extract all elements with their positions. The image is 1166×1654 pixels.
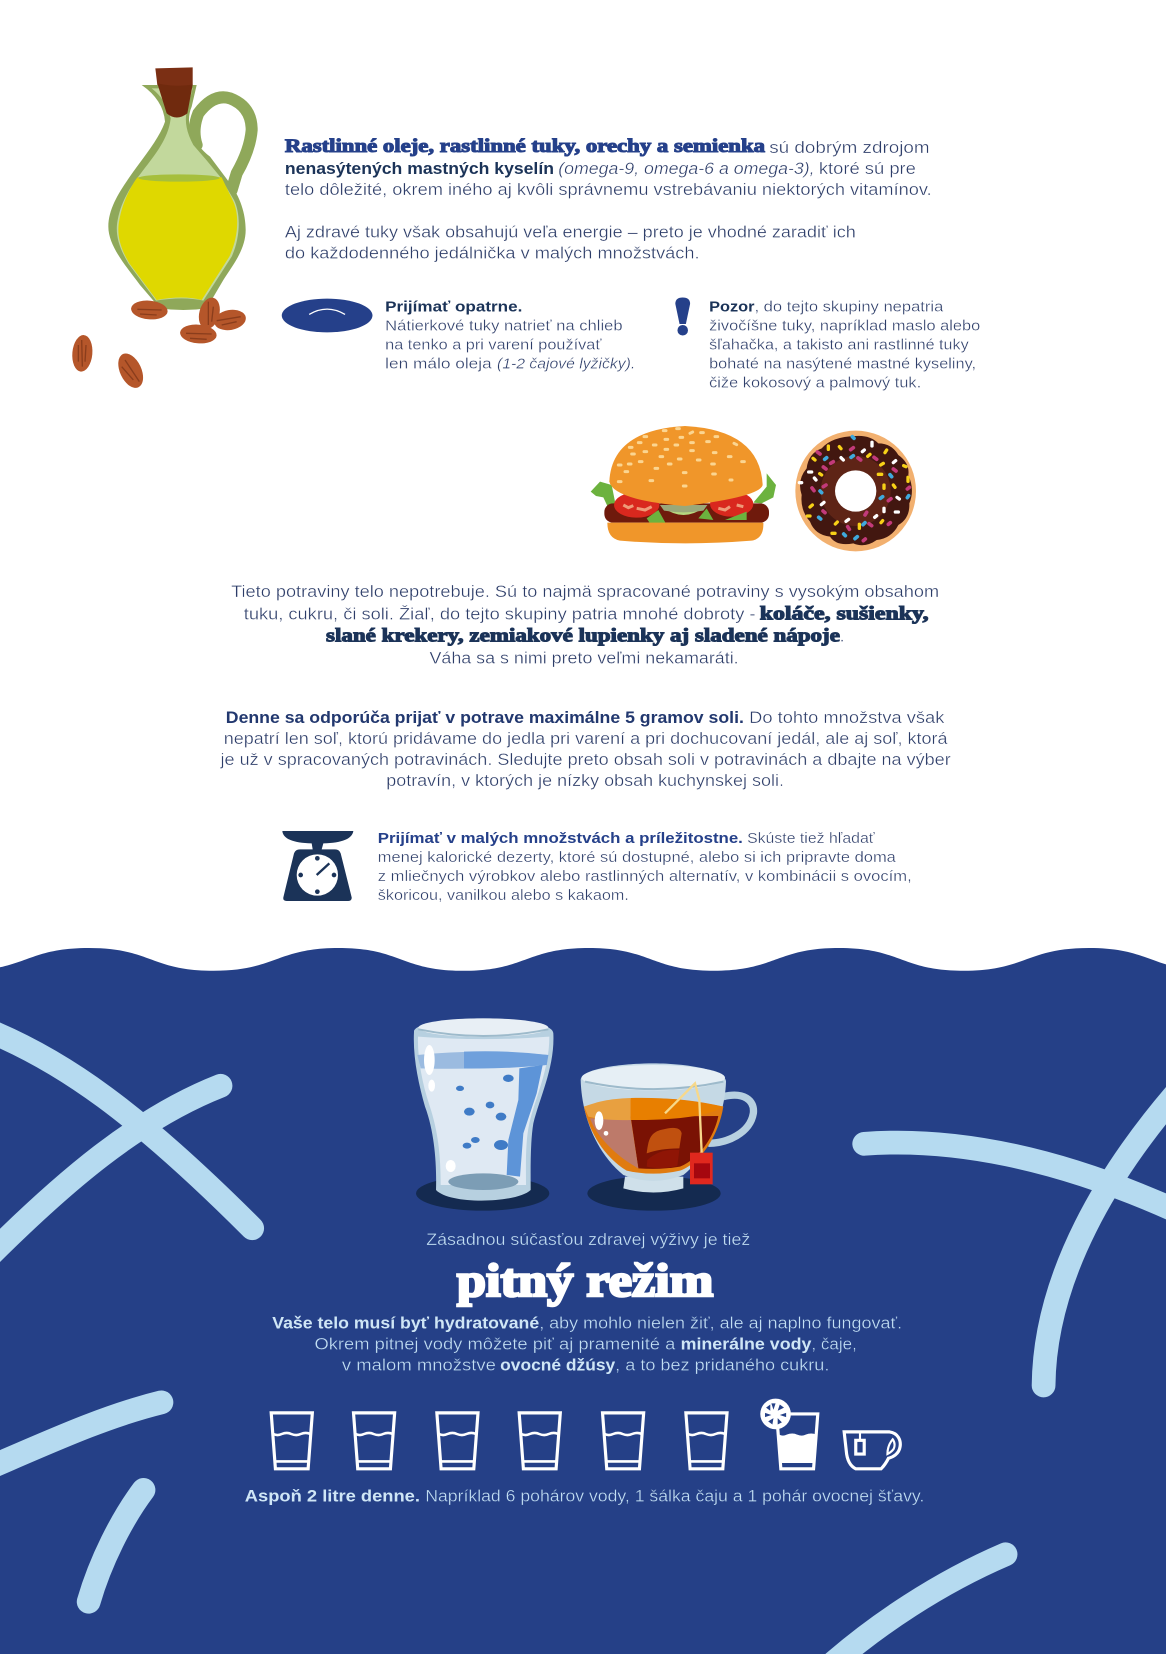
text block: healthy fats intro (285, 136, 932, 263)
text block: unnecessary foods: slané krekery, zemiakové lupienky aj sladené nápoje (326, 626, 840, 646)
panel: blue hydration section (0, 948, 1166, 1654)
text block: unnecessary foods: tuku, cukru, či soli. Žiaľ, do tejto skupiny patria mnohé dobroty - (244, 604, 756, 623)
text block: hydration advice (272, 1314, 902, 1375)
text block: small amounts: menej kalorické dezerty, ktoré sú dostupné, alebo si ich pripravte doma (378, 850, 897, 866)
text block: healthy fats intro: Aj zdravé tuky však obsahujú veľa energie – preto je vhodné zaradiť ich (285, 223, 856, 241)
text block: warning (709, 299, 980, 391)
text block: hydration advice: v malom množstve (342, 1357, 496, 1375)
text block: healthy fats intro: ktoré sú pre (819, 160, 916, 178)
text block: healthy fats intro: telo dôležité, okrem iného aj kvôli správnemu vstrebávaniu niektorých vitamínov. (285, 181, 932, 199)
text: daily amount (245, 1488, 924, 1506)
text block: healthy fats intro: (omega-9, omega-6 a omega-3), (558, 160, 815, 178)
text block: hydration advice: , čaje, (811, 1336, 857, 1354)
icon: tea cup (844, 1432, 900, 1469)
text block: small amounts: škoricou, vanilkou alebo s kakaom. (378, 888, 629, 904)
icon: water glass 3 (437, 1413, 478, 1469)
text block: warning: čiže kokosový a palmový tuk. (709, 375, 921, 391)
text block: warning: , do tejto skupiny nepatria (754, 299, 944, 315)
text block: hydration advice: , aby mohlo nielen žiť, ale aj naplno fungovať. (539, 1314, 902, 1332)
text block: consume carefully: Nátierkové tuky natrieť na chlieb (385, 318, 623, 334)
text block: hydration advice: ovocné džúsy (500, 1357, 615, 1375)
text block: hydration advice: minerálne vody (681, 1336, 811, 1354)
icon: kitchen scale (282, 831, 353, 901)
text block: salt recommendation: Do tohto množstva však (749, 709, 945, 727)
text block: salt recommendation: potravín, v ktorých je nízky obsah kuchynskej soli. (386, 772, 784, 790)
heading: pitný režim: pitný režim (457, 1256, 713, 1307)
text block: small amounts: z mliečnych výrobkov alebo rastlinných alternatív, v kombinácii s ovocím, (378, 869, 912, 885)
icon: plate (282, 299, 372, 332)
text block: small amounts: Prijímať v malých množstvách a príležitostne. (378, 831, 743, 847)
text: daily amount: Aspoň 2 litre denne. (245, 1488, 420, 1506)
text block: small amounts: Skúste tiež hľadať (747, 831, 875, 847)
text: hydration lead-in: Zásadnou súčasťou zdravej výživy je tiež (426, 1231, 750, 1249)
text block: unnecessary foods (231, 583, 939, 668)
text block: salt recommendation (219, 709, 951, 790)
text block: warning: Pozor (709, 299, 755, 315)
text block: consume carefully (385, 299, 635, 372)
text block: consume carefully: Prijímať opatrne. (385, 299, 522, 315)
icon: water glass 5 (603, 1413, 644, 1469)
text block: unnecessary foods: koláče, sušienky, (760, 603, 929, 623)
text block: healthy fats intro: sú dobrým zdrojom (769, 139, 930, 157)
icon: juice glass with citrus slice (760, 1399, 818, 1469)
background brush curves (0, 1029, 1166, 1654)
text block: unnecessary foods: . (840, 628, 844, 646)
text block: warning: šľahačka, a takisto ani rastlinné tuky (709, 337, 969, 353)
text block: hydration advice: , a to bez pridaného cukru. (615, 1357, 829, 1375)
icon: water glass 2 (353, 1413, 395, 1469)
text block: healthy fats intro: Rastlinné oleje, rastlinné tuky, orechy a semienka (285, 136, 765, 156)
text block: warning: bohaté na nasýtené mastné kyseliny, (709, 356, 976, 372)
text block: healthy fats intro: do každodenného jedálnička v malých množstvách. (285, 245, 700, 263)
icon: water glass 4 (519, 1413, 560, 1469)
text block: hydration advice: Vaše telo musí byť hydratované (272, 1314, 539, 1332)
illustration: glass of water (414, 1018, 553, 1211)
text block: consume carefully: na tenko a pri varení používať (385, 337, 602, 353)
icon: water glass 6 (686, 1413, 727, 1469)
text block: salt recommendation: Denne sa odporúča prijať v potrave maximálne 5 gramov soli. (226, 709, 744, 727)
text: daily amount: Napríklad 6 pohárov vody, 1 šálka čaju a 1 pohár ovocnej šťavy. (425, 1488, 924, 1506)
text block: consume carefully: (1-2 čajové lyžičky). (497, 356, 635, 372)
icon: exclamation mark (675, 298, 690, 336)
text block: unnecessary foods: Tieto potraviny telo nepotrebuje. Sú to najmä spracované potraviny s vysokým obsahom (231, 583, 939, 601)
icon row: daily drinks (271, 1399, 900, 1469)
text block: warning: živočíšne tuky, napríklad maslo alebo (709, 318, 980, 334)
text block: hydration advice: Okrem pitnej vody môžete piť aj pramenité a (314, 1336, 676, 1354)
text block: unnecessary foods: Váha sa s nimi preto veľmi nekamaráti. (429, 650, 739, 668)
illustration: burger (591, 426, 776, 543)
illustration: oil jug with almonds (71, 67, 252, 392)
text block: consume carefully: len málo oleja (385, 356, 493, 372)
text block: healthy fats intro: nenasýtených mastných kyselín (285, 160, 554, 178)
text block: salt recommendation: nepatrí len soľ, ktorú pridávame do jedla pri varení a pri dochucovaní jedál, ale aj soľ, ktorá (224, 730, 949, 748)
icon: water glass 1 (271, 1413, 312, 1469)
illustration: cup of tea (581, 1063, 753, 1211)
text block: salt recommendation: je už v spracovaných potravinách. Sledujte preto obsah soli v potravinách a dbajte na výber (219, 751, 951, 769)
text block: small amounts (378, 831, 912, 904)
illustration: donut (795, 431, 916, 551)
